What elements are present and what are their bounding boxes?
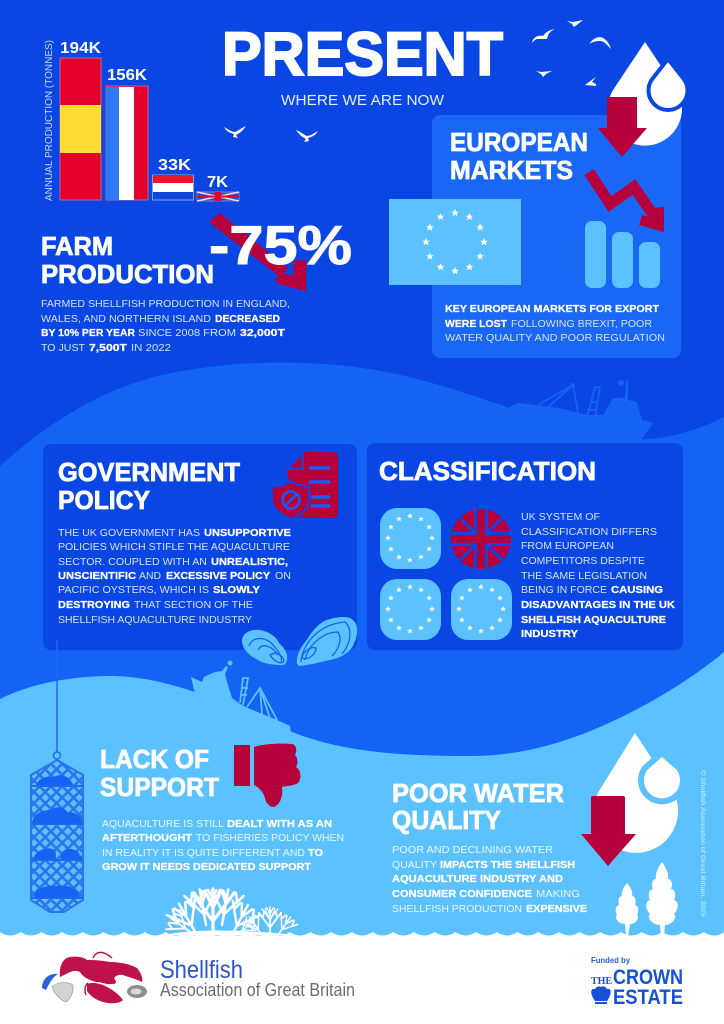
body: MAKING (536, 888, 580, 900)
bar: France 156K (106, 67, 148, 200)
wordmark (160, 956, 355, 1000)
body: CONSUMER CONFIDENCE (392, 888, 532, 900)
heading: SUPPORT (100, 772, 219, 802)
panel: european markets (389, 42, 688, 358)
illustration: ship silhouette on upper wave (510, 380, 653, 444)
body: BY 10% PER YEAR (41, 327, 135, 339)
illustration: sea plants (616, 862, 678, 937)
body: CLASSIFICATION DIFFERS (521, 526, 657, 538)
body: COMPETITORS DESPITE (521, 555, 645, 567)
body: AFTERTHOUGHT (102, 832, 193, 844)
body: POOR AND DECLINING WATER (392, 844, 553, 856)
panel: government policy (43, 444, 357, 650)
bar chart: annual production (43, 40, 239, 201)
subtitle: WHERE WE ARE NOW (281, 93, 444, 109)
body: EXPENSIVE (526, 903, 587, 915)
shell: blue mussel (42, 974, 58, 990)
heading: PRODUCTION (41, 259, 214, 289)
body: TO (308, 847, 323, 859)
bar: UK 7K: 7K (207, 174, 228, 191)
background: light blue wave (0, 652, 724, 940)
title: PRESENT (222, 20, 503, 88)
icon: EU tile bottom left (380, 579, 441, 640)
body: FROM EUROPEAN (521, 540, 614, 552)
body (392, 844, 587, 915)
logo: funded by The Crown Estate: Funded by (591, 955, 630, 965)
body: DEALT WITH AS AN (227, 818, 332, 830)
heading (392, 778, 564, 835)
body: 7,500T (89, 342, 128, 354)
logo: funded by The Crown Estate: ESTATE (613, 986, 683, 1009)
body: IMPACTS THE SHELLFISH (440, 859, 575, 871)
body: CAUSING (611, 584, 663, 596)
shell: scallop (52, 983, 73, 1002)
heading: POOR WATER (392, 778, 564, 808)
body: PACIFIC OYSTERS, WHICH IS (58, 584, 209, 596)
lobster (60, 952, 142, 1003)
chart icon: falling bars (585, 221, 660, 288)
heading (58, 457, 240, 515)
text block: lack of support (100, 744, 344, 873)
icon: oyster shells (242, 617, 357, 666)
oyster right (297, 617, 357, 666)
arrow: zigzag decline (589, 172, 664, 232)
body: FOLLOWING BREXIT, POOR (511, 318, 652, 330)
body: WATER QUALITY AND POOR REGULATION (445, 332, 665, 344)
panel: classification (367, 443, 683, 650)
panel background (432, 115, 681, 358)
heading (100, 744, 219, 802)
icon: document with shield (272, 452, 338, 519)
body: DESTROYING (58, 599, 130, 611)
icon: EU tile bottom right (451, 579, 512, 640)
background: mid blue wave (0, 363, 724, 1024)
body (41, 298, 290, 354)
heading: POLICY (58, 485, 150, 515)
body: UNREALISTIC, (211, 556, 288, 568)
birds (224, 20, 611, 142)
body: FARMED SHELLFISH PRODUCTION IN ENGLAND, (41, 298, 290, 310)
body: AND (139, 570, 161, 582)
bar: Spain 194K: 194K (60, 40, 101, 57)
logo: Shellfish Association of Great Britain (42, 952, 355, 1003)
body: TO JUST (41, 342, 86, 354)
body: IN REALITY IT IS QUITE DIFFERENT AND (102, 847, 305, 859)
bar: Netherlands 33K (152, 157, 194, 200)
body: AQUACULTURE INDUSTRY AND (392, 873, 563, 885)
logo: funded by The Crown Estate: CROWN (613, 966, 683, 989)
logo: funded by The Crown Estate: THE (591, 976, 612, 987)
bar: Netherlands 33K: 33K (158, 157, 191, 174)
wordmark: Association of Great Britain (160, 979, 355, 1000)
footer band with scalloped edge (0, 932, 724, 1024)
text block: farm production (41, 231, 290, 354)
body: THAT SECTION OF THE (134, 599, 253, 611)
body: EXCESSIVE POLICY (166, 570, 270, 582)
body: SECTOR. COUPLED WITH AN (58, 556, 207, 568)
copyright note: © Shellfish Association of Great Britain, 2025 (699, 770, 706, 918)
illustration: coral (164, 887, 299, 943)
heading: LACK OF (100, 744, 209, 774)
heading (450, 127, 588, 185)
stat: -75%: -75% (209, 214, 352, 276)
shell: oyster (127, 985, 147, 998)
body: SHELLFISH AQUACULTURE (521, 614, 666, 626)
heading (41, 231, 214, 289)
body (521, 511, 675, 640)
body (445, 303, 665, 344)
body: POLICIES WHICH STIFLE THE AQUACULTURE (58, 541, 290, 553)
icon: water drops with arrow (598, 42, 688, 157)
body: UK SYSTEM OF (521, 511, 600, 523)
body: TO FISHERIES POLICY WHEN (196, 832, 344, 844)
heading: FARM (41, 231, 113, 261)
body: THE UK GOVERNMENT HAS (58, 527, 200, 539)
body: SINCE 2008 FROM (138, 327, 236, 339)
arrow: falling production (209, 213, 306, 291)
panel background (367, 443, 683, 650)
body: UNSCIENTIFIC (58, 570, 136, 582)
body: SLOWLY (213, 584, 260, 596)
body: DISADVANTAGES IN THE UK (521, 599, 675, 611)
icon: water drops with arrow (581, 733, 683, 866)
body: KEY EUROPEAN MARKETS FOR EXPORT (445, 303, 660, 315)
body: QUALITY (392, 859, 437, 871)
logo: funded by The Crown Estate (591, 955, 683, 1009)
body: 32,000T (240, 327, 286, 339)
body: UNSUPPORTIVE (204, 527, 291, 539)
heading: CLASSIFICATION (379, 456, 596, 486)
heading: MARKETS (450, 155, 573, 185)
body: GROW IT NEEDS DEDICATED SUPPORT (102, 861, 312, 873)
wordmark: Shellfish (160, 956, 243, 984)
body: IN 2022 (131, 342, 171, 354)
body: AQUACULTURE IS STILL (102, 818, 224, 830)
text block: poor water quality (392, 778, 587, 915)
body: SHELLFISH AQUACULTURE INDUSTRY (58, 614, 252, 626)
body: WERE LOST (445, 318, 508, 330)
heading: GOVERNMENT (58, 457, 240, 487)
icon: EU tile top left (380, 508, 441, 569)
bar: Spain 194K (60, 40, 101, 200)
icon: lobster and shells (42, 952, 147, 1003)
icon: UK flag circle (451, 509, 511, 569)
body: BEING IN FORCE (521, 584, 607, 596)
illustration: ship silhouette on lower wave (191, 660, 292, 742)
bar: France 156K: 156K (107, 67, 147, 84)
body: THE SAME LEGISLATION (521, 570, 647, 582)
bar: UK 7K (197, 174, 239, 201)
illustration: hanging oyster lantern net (31, 640, 83, 912)
body: SHELLFISH PRODUCTION (392, 903, 522, 915)
icon: crown (591, 986, 611, 1004)
body: DECREASED (215, 313, 280, 325)
body: ON (275, 570, 291, 582)
body (102, 818, 344, 873)
body: WALES, AND NORTHERN ISLAND (41, 313, 211, 325)
panel background (43, 444, 357, 650)
heading: EUROPEAN (450, 127, 588, 157)
body (58, 527, 291, 626)
icon: EU flag (389, 199, 521, 285)
heading: QUALITY (392, 805, 501, 835)
icon: thumbs down (234, 744, 300, 807)
axis label: ANNUAL PRODUCTION (TONNES) (43, 40, 55, 201)
oyster left (242, 630, 287, 665)
body: INDUSTRY (521, 628, 578, 640)
